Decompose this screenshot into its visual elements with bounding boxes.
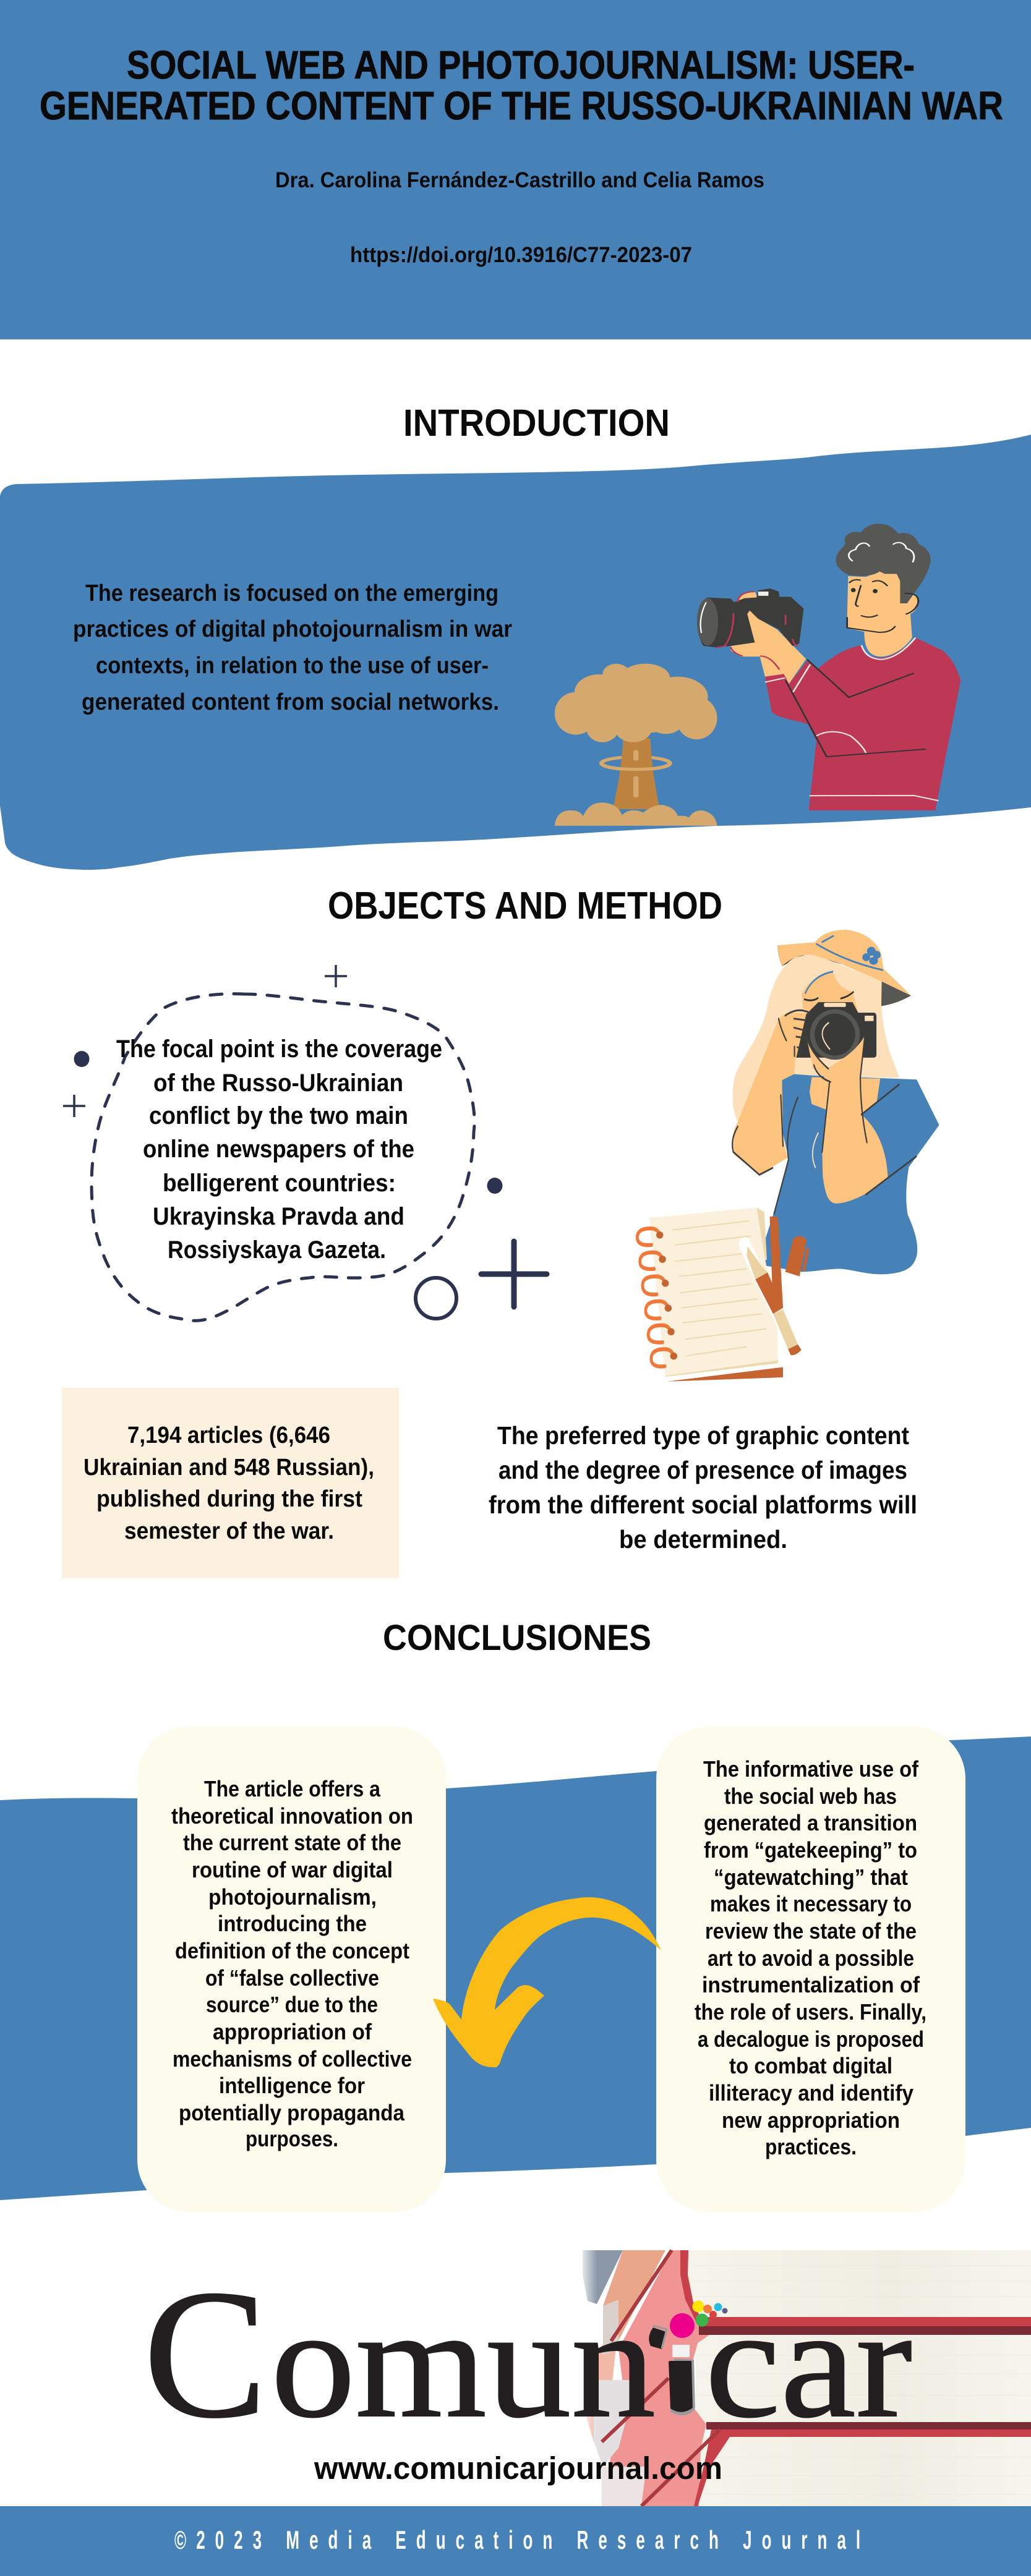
icon: coloured dots [670,2301,727,2338]
logo: Comunicar: car [705,2276,912,2451]
logo: Comunicar [143,2252,912,2456]
pen [745,1245,796,1353]
right card text: a decalogue is proposed [698,2026,924,2052]
hat underside [777,945,911,1006]
blue wave background [0,435,1031,870]
logo: Comunicar: C [143,2252,267,2456]
red cover [609,2250,711,2506]
heading: objects and method: OBJECTS AND METHOD [328,885,722,927]
left card text: The article offers a [204,1776,381,1801]
right card text: practices. [765,2134,857,2159]
strap and cap [770,1217,783,1311]
pages [687,2250,1031,2317]
hat [777,930,911,996]
left card text: theoretical innovation on [171,1803,413,1829]
header panel [0,0,1031,339]
intro text: generated content from social networks. [82,689,499,715]
hair [836,524,931,603]
right card text [695,1756,926,2159]
articles text: Ukrainian and 548 Russian), [83,1455,374,1481]
decorative dashed blob [92,994,474,1320]
doi: https://doi.org/10.3916/C77-2023-07 [350,243,692,267]
left card text: definition of the concept [175,1938,409,1963]
website url: www.comunicarjournal.com [314,2451,722,2486]
footer [0,2506,1031,2576]
blue band [0,1736,1031,2200]
panel: articles box [62,1388,399,1578]
hand and body lines [732,1010,916,1214]
right card text: makes it necessary to [710,1891,912,1916]
right card text: The informative use of [703,1756,919,1782]
right card text: the social web has [724,1783,897,1809]
camera [796,1002,876,1058]
text block: graphic content: be determined. [619,1525,787,1554]
spiral rings [637,1228,674,1366]
text block: graphic content: The preferred type of graphic content [497,1421,909,1450]
focal point text: Rossiyskaya Gazeta. [168,1236,386,1264]
right card text: new appropriation [722,2107,900,2133]
faded covers [583,2250,623,2304]
articles text: semester of the war. [124,1518,334,1544]
left card text [171,1776,413,2151]
logo: Comunicar: omun [271,2276,656,2451]
heading: conclusiones: CONCLUSIONES [383,1618,651,1658]
copyright: ©2023 Media Education Research Journal [174,2526,860,2555]
icon: usb stick [649,2326,695,2415]
fade [578,2250,597,2506]
text block: graphic content [489,1421,917,1554]
left card text: photojournalism, [208,1884,377,1910]
intro text [73,580,512,715]
blue shirt [758,1074,939,1274]
notebook [756,1207,767,1260]
ring [416,1278,456,1319]
icon: woman with camera and notebook [637,930,939,1382]
left card text: introducing the [218,1911,367,1936]
right card text: review the state of the [705,1918,917,1944]
left card text: intelligence for [219,2073,365,2098]
focal point text: The focal point is the coverage [116,1035,442,1063]
articles text [83,1422,374,1544]
left card text: source” due to the [206,1992,378,2017]
heading: introduction: INTRODUCTION [403,402,670,444]
right card text: the role of users. Finally, [695,1999,926,2025]
band upper [694,2315,1031,2326]
image: stack of books [578,2250,1031,2506]
focal point text: belligerent countries: [163,1170,396,1197]
camera [698,589,803,647]
left card text: the current state of the [183,1830,401,1855]
large plus [481,1241,547,1307]
face and neck [847,571,919,657]
icon: mushroom cloud [555,664,717,826]
articles text: published during the first [96,1486,362,1512]
left card text: potentially propaganda [179,2100,405,2125]
left card text: purposes. [246,2126,338,2151]
intro text: The research is focused on the emerging [85,580,498,606]
arms and hands [732,1013,810,1175]
focal point text: online newspapers of the [143,1136,414,1163]
left card text: mechanisms of collective [173,2046,412,2072]
left card text: of “false collective [205,1965,379,1991]
right card text: generated a transition [704,1810,917,1835]
right card text: to combat digital [729,2053,892,2078]
text block: graphic content: and the degree of presence of images [498,1456,907,1484]
face [802,972,858,1013]
sweater [765,638,960,810]
right card text: instrumentalization of [702,1972,920,1997]
stripes [602,2250,720,2506]
dot right [487,1178,502,1194]
left card text: routine of war digital [192,1857,393,1882]
right card text: illiteracy and identify [709,2080,913,2106]
focal point text: Ukrayinska Pravda and [153,1203,404,1230]
left card text: appropriation of [213,2019,372,2044]
articles text: 7,194 articles (6,646 [127,1422,330,1448]
band lower [706,2422,1031,2429]
right card text: art to avoid a possible [708,1945,914,1971]
focal point text [116,1035,442,1264]
intro text: contexts, in relation to the use of user- [96,653,489,679]
holding hand [806,1035,865,1080]
panel: introduction [0,435,1031,870]
intro text: practices of digital photojournalism in war [73,616,512,642]
right card [656,1727,965,2212]
left card [137,1727,446,2212]
title: SOCIAL WEB AND PHOTOJOURNALISM: USER- [127,43,915,87]
arm and hand [731,611,806,684]
arrow [433,1897,661,2067]
panel: conclusions [0,1727,1031,2212]
small plus left [63,1095,85,1117]
right card text: “gatewatching” that [714,1864,908,1890]
facial features [847,580,918,632]
small plus top [325,965,347,987]
dot left [74,1051,89,1067]
hair [732,954,899,1122]
focal point text: conflict by the two main [149,1102,408,1129]
panel: focal point blob [63,965,547,1320]
right card text: from “gatekeeping” to [704,1837,917,1863]
title [40,43,1003,128]
focal point text: of the Russo-Ukrainian [153,1069,403,1097]
icon: male photographer [697,524,960,810]
sweater lines [785,660,926,757]
text block: graphic content: from the different social platforms will [489,1490,917,1519]
authors: Dra. Carolina Fernández-Castrillo and Celia Ramos [275,168,764,192]
